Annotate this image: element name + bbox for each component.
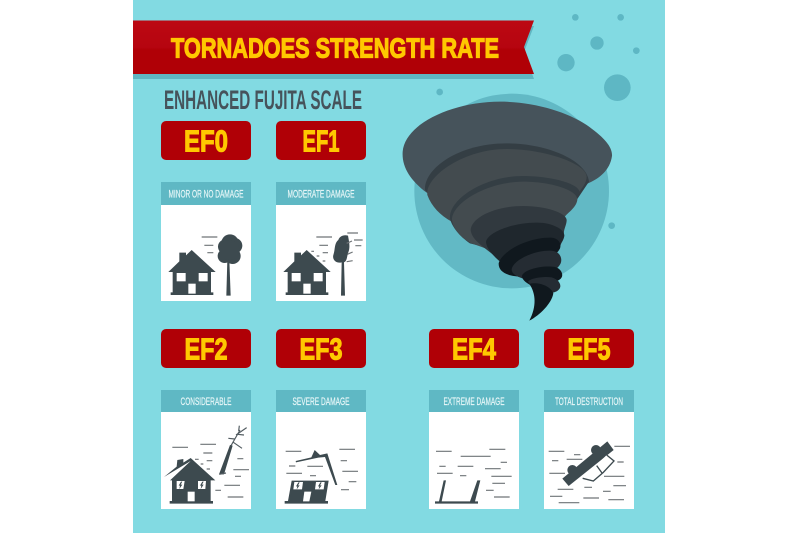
card heading: extreme damage: EXTREME DAMAGE: [444, 396, 504, 408]
subtitle: ENHANCED FUJITA SCALE: [164, 85, 362, 115]
badge: EF5: EF5: [568, 332, 610, 366]
badge: EF0: EF0: [184, 124, 228, 158]
card heading: total destruction: TOTAL DESTRUCTION: [555, 396, 623, 408]
title: TORNADOES STRENGTH RATE: [171, 32, 499, 64]
card heading: minor or no damage: MINOR OR NO DAMAGE: [168, 188, 244, 200]
icon: bare house foundation: [435, 449, 512, 504]
icon: overturned car: [549, 441, 630, 503]
card heading: moderate damage: MODERATE DAMAGE: [288, 188, 354, 200]
badge: EF3: EF3: [300, 332, 342, 366]
badge: EF2: [161, 329, 251, 368]
decorative floating debris dots: [436, 14, 640, 229]
title banner: [133, 20, 534, 79]
badge: EF0: [161, 121, 251, 160]
badge: EF2: EF2: [184, 332, 228, 366]
card: EF4 extreme damage: [429, 390, 519, 509]
badge: EF3: [276, 329, 366, 368]
icon: house with roof torn off: [285, 449, 358, 504]
card: EF5 total destruction: [544, 390, 634, 509]
icon: damaged house and broken tree: [164, 426, 249, 504]
badge: EF1: [276, 121, 366, 160]
icon: intact house and tree: [168, 234, 242, 296]
card: EF2 considerable: [161, 390, 251, 509]
panel: background: [133, 0, 665, 533]
badge: EF5: [544, 329, 634, 368]
icon: house with bent tree: [283, 233, 363, 296]
badge: EF1: EF1: [302, 124, 340, 158]
card: EF1 moderate damage: [276, 182, 366, 301]
card: EF0 minor or no damage: [161, 182, 251, 301]
card heading: considerable: CONSIDERABLE: [180, 396, 232, 408]
card: EF3 severe damage: [276, 390, 366, 509]
tornado illustration: [403, 94, 612, 321]
badge: EF4: [429, 329, 519, 368]
card heading: severe damage: SEVERE DAMAGE: [292, 396, 350, 408]
badge: EF4: EF4: [452, 332, 497, 366]
